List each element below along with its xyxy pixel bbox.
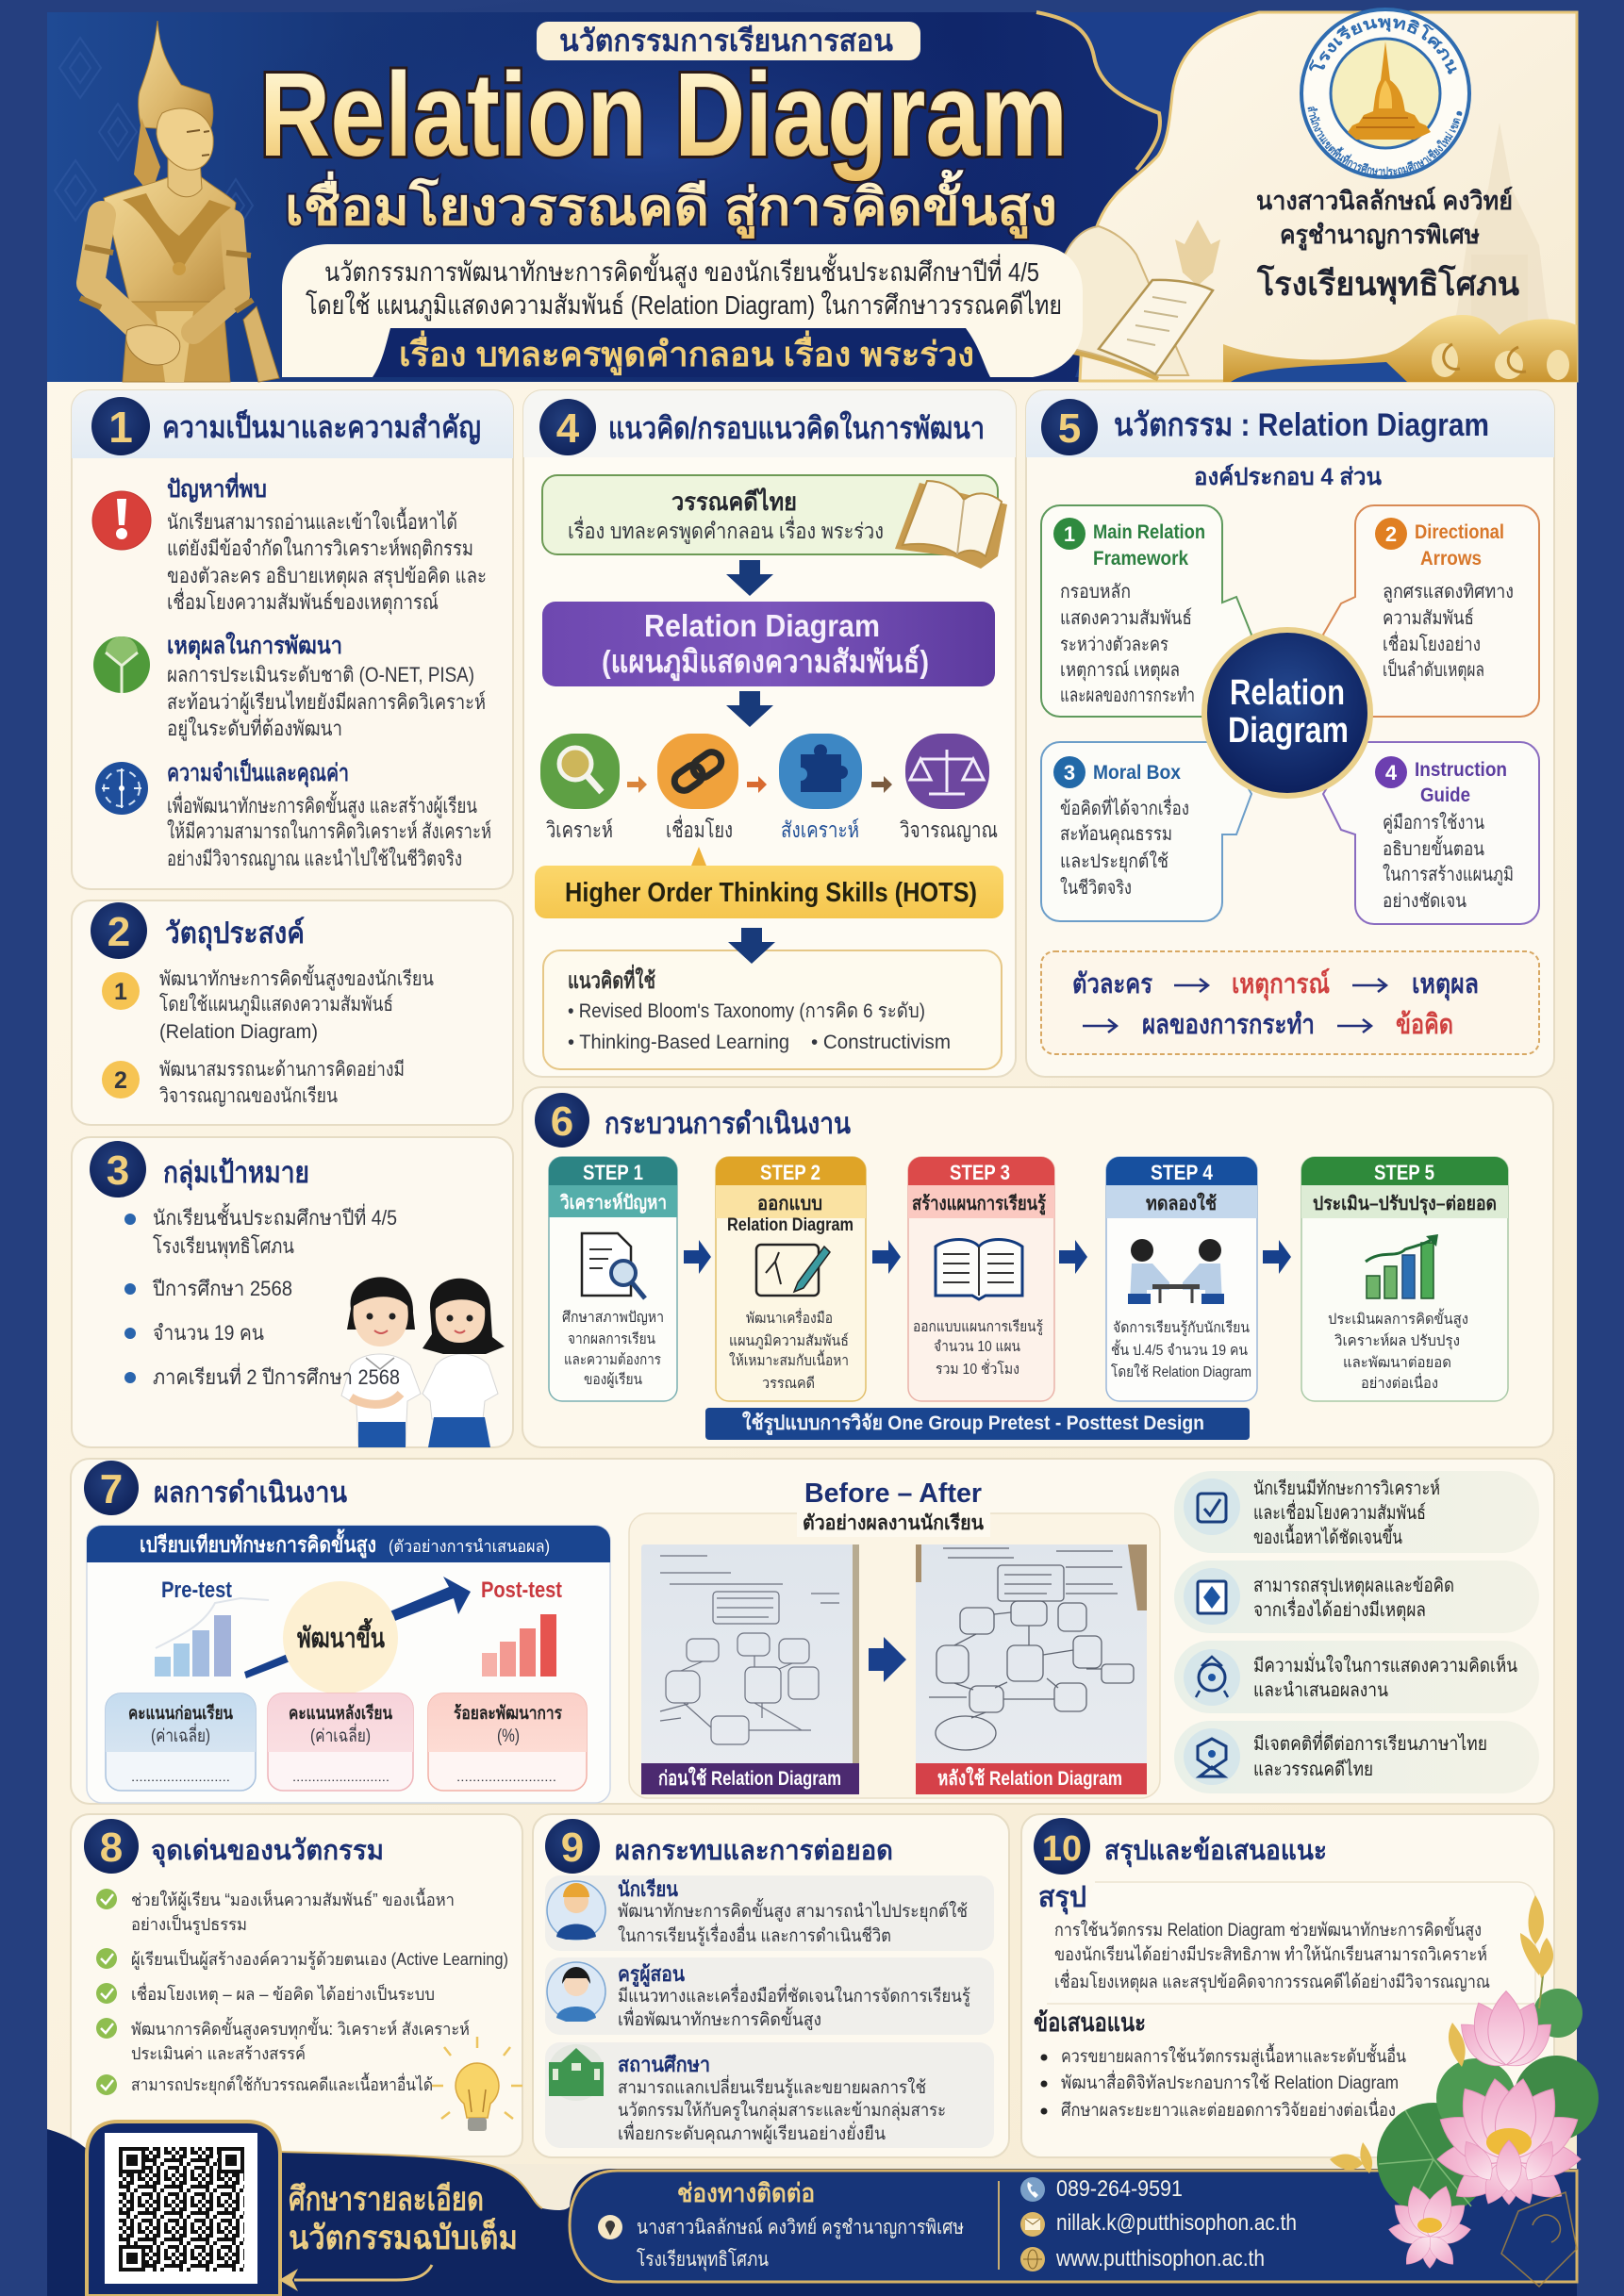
- target list: โรงเรียนพุทธิโศภน: [153, 1234, 294, 1259]
- recommendations block: ศึกษาผลระยะยาวและต่อยอดการวิจัยอย่างต่อเนื่อง: [1061, 2097, 1396, 2121]
- box: directional arrows: Directional: [1415, 521, 1504, 543]
- objective 2: 2: [114, 1067, 127, 1094]
- box: directional arrows: เชื่อมโยงอย่าง: [1383, 631, 1481, 655]
- before-after card: [629, 1476, 1160, 1798]
- box: instruction guide: Instruction: [1415, 759, 1507, 781]
- objective 2: วิจารณญาณของนักเรียน: [159, 1085, 338, 1107]
- step 3: STEP 3: [950, 1161, 1010, 1184]
- step 3: ออกแบบแผนการเรียนรู้: [913, 1319, 1043, 1336]
- arms: [91, 215, 143, 332]
- skill: synthesise: สังเคราะห์: [781, 818, 859, 842]
- block: reason: สะท้อนว่าผู้เรียนไทยยังมีผลการคิดวิเคราะห์: [167, 690, 486, 715]
- footer band: [47, 2122, 1577, 2296]
- step 3: [908, 1157, 1054, 1401]
- objective 2: [102, 1059, 405, 1107]
- box: concepts used: • Thinking-Based Learning: [568, 1032, 789, 1053]
- step 3: จำนวน 10 แผน: [934, 1339, 1020, 1355]
- score box: post: [268, 1693, 413, 1791]
- block: reason: อยู่ในระดับที่ต้องพัฒนา: [167, 714, 342, 741]
- impact: teachers: [545, 1957, 994, 2035]
- step 5: วิเคราะห์ผล ปรับปรุง: [1334, 1332, 1460, 1350]
- panel 10: conclusion: 10: [1042, 1829, 1082, 1869]
- arrow down: [726, 560, 773, 596]
- centre circle: relation diagram: Relation: [1230, 673, 1345, 713]
- score box: pre: .........................: [131, 1770, 230, 1784]
- outcome 4: [1174, 1721, 1539, 1793]
- block: reason: [167, 631, 486, 741]
- panel 9: impact: [533, 1814, 1009, 2157]
- skill: connect: [657, 734, 738, 842]
- panel 2: objectives: 2: [108, 909, 130, 955]
- description bubble: นวัตกรรมการพัฒนาทักษะการคิดขั้นสูง ของนักเรียนชั้นประถมศึกษาปีที่ 4/5: [324, 253, 1039, 289]
- icon: light bulb: [432, 2037, 522, 2131]
- subtitle: เชื่อมโยงวรรณคดี สู่การคิดขั้นสูง: [285, 170, 1057, 239]
- panel 4: concept framework: 4: [556, 405, 580, 452]
- panel 8: highlights: [71, 1814, 522, 2156]
- hands: [126, 325, 180, 365]
- box: moral box: Moral Box: [1093, 762, 1181, 784]
- heading 8: จุดเด่นของนวัตกรรม: [151, 1836, 384, 1867]
- step 4: จัดการเรียนรู้กับนักเรียน: [1113, 1320, 1250, 1337]
- QR prompt: ศึกษารายละเอียด: [289, 2181, 484, 2218]
- box: main relation framework: Framework: [1093, 548, 1188, 570]
- before-after card: Before – After: [804, 1478, 982, 1509]
- panel 4: concept framework: [523, 390, 1016, 1077]
- panel 6: process: 6: [551, 1098, 573, 1145]
- block: value: [167, 758, 491, 870]
- heading 7: ผลการดำเนินงาน: [154, 1478, 347, 1509]
- faint temple: [1443, 123, 1561, 358]
- photo: after: หลังใช้ Relation Diagram: [937, 1766, 1122, 1790]
- outcome 3: [1174, 1641, 1539, 1713]
- sub heading: องค์ประกอบ 4 ส่วน: [1194, 463, 1382, 490]
- objective 1: [102, 965, 434, 1043]
- school logo: [1300, 8, 1471, 179]
- QR card: [87, 2122, 280, 2296]
- box: HOTS: [535, 847, 1003, 918]
- illustration: two students: [341, 1277, 505, 1447]
- step 2: Relation Diagram: [727, 1215, 853, 1235]
- step 1: [549, 1157, 677, 1401]
- icon: blue dial: [95, 762, 148, 815]
- target list: ปีการศึกษา 2568: [152, 1277, 292, 1300]
- step 2: STEP 2: [760, 1161, 820, 1184]
- panel 7: results: 7: [100, 1466, 123, 1512]
- highlight list: เชื่อมโยงเหตุ – ผล – ข้อคิด ได้อย่างเป็นระบบ: [131, 1982, 435, 2005]
- step 5: ประเมินผลการคิดขั้นสูง: [1328, 1308, 1468, 1329]
- post-test chart: [481, 1577, 562, 1677]
- phone: 089-264-9591: [1056, 2176, 1183, 2202]
- lotus: small flower: [1387, 2183, 1472, 2270]
- recommendations block: พัฒนาสื่อดิจิทัลประกอบการใช้ Relation Diagram: [1061, 2070, 1399, 2093]
- icon: open book: [895, 481, 1007, 569]
- step 1: ของผู้เรียน: [584, 1372, 642, 1389]
- lotus leaves: [1330, 1895, 1599, 2216]
- face: [157, 108, 213, 170]
- box: moral box: ในชีวิตจริง: [1060, 877, 1132, 899]
- outcome 1: ของเนื้อหาได้ชัดเจนขึ้น: [1253, 1524, 1402, 1548]
- highlight list: พัฒนาการคิดขั้นสูงครบทุกขั้น: วิเคราะห์ สังเคราะห์: [131, 2017, 470, 2040]
- right blue curve area: [1036, 12, 1577, 377]
- step 1: วิเคราะห์ปัญหา: [559, 1192, 667, 1214]
- heading 2: วัตถุประสงค์: [165, 917, 305, 951]
- box: main relation framework: 1: [1064, 522, 1075, 546]
- right cream area: [1080, 12, 1577, 381]
- box: Thai literature: วรรณคดีไทย: [671, 487, 797, 516]
- impact: school: นวัตกรรมให้กับครูในกลุ่มสาระและข้ามกลุ่มสาระ: [618, 2100, 946, 2122]
- score box: post: (ค่าเฉลี่ย): [310, 1723, 371, 1746]
- step 5: [1301, 1157, 1508, 1401]
- header banner: [47, 8, 1579, 383]
- outcome 4: และวรรณคดีไทย: [1253, 1759, 1373, 1780]
- contact block: โรงเรียนพุทธิโศภน: [637, 2248, 769, 2271]
- step 4: [1106, 1157, 1257, 1401]
- heading 6: กระบวนการดำเนินงาน: [605, 1107, 851, 1140]
- outcome 1: [1174, 1471, 1539, 1553]
- impact: students: [545, 1875, 994, 1951]
- panel 6: process: [522, 1087, 1553, 1447]
- box: directional arrows: [1323, 505, 1539, 717]
- conclusion block: [1038, 1882, 1535, 2004]
- outcome 3: มีความมั่นใจในการแสดงความคิดเห็น: [1253, 1652, 1517, 1677]
- impact: students: ในการเรียนรู้เรื่องอื่น และการดำเนินชีวิต: [618, 1923, 891, 1946]
- step 4: โดยใช้ Relation Diagram: [1111, 1363, 1251, 1380]
- step 2: ให้เหมาะสมกับเนื้อหา: [729, 1349, 849, 1369]
- box: relation diagram: Relation Diagram: [644, 608, 880, 643]
- step 3: สร้างแผนการเรียนรู้: [912, 1193, 1046, 1216]
- header book: [1047, 220, 1220, 379]
- heading 1: ความเป็นมาและความสำคัญ: [162, 408, 481, 445]
- score box: pre: (ค่าเฉลี่ย): [151, 1723, 210, 1746]
- post-test chart: Post-test: [481, 1577, 562, 1603]
- highlight list: ช่วยให้ผู้เรียน “มองเห็นความสัมพันธ์” ของเนื้อหา: [131, 1888, 455, 1910]
- box: directional arrows: ลูกศรแสดงทิศทาง: [1383, 582, 1514, 603]
- box: directional arrows: Arrows: [1420, 548, 1482, 570]
- photo: after: [916, 1544, 1147, 1794]
- outcome 2: จากเรื่องได้อย่างมีเหตุผล: [1253, 1596, 1426, 1622]
- centre circle: relation diagram: [1204, 630, 1370, 796]
- necklace: [123, 193, 231, 273]
- block: reason: เหตุผลในการพัฒนา: [167, 631, 342, 661]
- email: nillak.k@putthisophon.ac.th: [1056, 2210, 1297, 2236]
- teacher name: [1256, 186, 1519, 305]
- arrow: before to after: [869, 1637, 906, 1682]
- step 4: STEP 4: [1151, 1161, 1214, 1184]
- lotus decoration: [1330, 1895, 1599, 2287]
- garment: [123, 297, 230, 382]
- contact block: นางสาวนิลลักษณ์ คงวิทย์ ครูชำนาญการพิเศษ: [637, 2216, 964, 2239]
- score box: percent: .........................: [456, 1770, 556, 1784]
- target list: จำนวน 19 คน: [153, 1321, 264, 1345]
- objective 1: โดยใช้แผนภูมิแสดงความสัมพันธ์: [159, 993, 393, 1016]
- girl: [423, 1354, 498, 1419]
- teacher name: นางสาวนิลลักษณ์ คงวิทย์: [1256, 186, 1513, 215]
- impact: teachers: เพื่อพัฒนาทักษะการคิดขั้นสูง: [618, 2007, 821, 2030]
- title: Relation Diagram: [259, 48, 1068, 181]
- box: main relation framework: ระหว่างตัวละคร: [1060, 635, 1168, 655]
- boy: [341, 1354, 421, 1445]
- box: main relation framework: [1041, 505, 1251, 717]
- step 1: และความต้องการ: [564, 1352, 661, 1368]
- panel 3: target group: 3: [107, 1148, 129, 1194]
- step 4: ทดลองใช้: [1146, 1192, 1217, 1214]
- panel 9: impact: 9: [561, 1825, 584, 1871]
- box: instruction guide: ในการสร้างแผนภูมิ: [1383, 864, 1514, 886]
- highlight list: [131, 1888, 508, 2095]
- panel 8: highlights: 8: [100, 1825, 123, 1871]
- contact block: [598, 2179, 999, 2271]
- impact: school: สถานศึกษา: [618, 2053, 710, 2076]
- outcome 1: และเชื่อมโยงความสัมพันธ์: [1253, 1499, 1426, 1524]
- skill: analyse: วิเคราะห์: [546, 818, 613, 842]
- research design banner: ใช้รูปแบบการวิจัย One Group Pretest - Posttest Design: [742, 1411, 1204, 1436]
- centre circle: relation diagram: Diagram: [1228, 711, 1349, 751]
- flow box: ผลของการกระทำ: [1142, 1010, 1315, 1040]
- block: problem: แต่ยังมีข้อจำกัดในการวิเคราะห์พฤติกรรม: [167, 537, 473, 560]
- outcome 4: มีเจตคติที่ดีต่อการเรียนภาษาไทย: [1253, 1730, 1487, 1755]
- panel 2: objectives: [72, 900, 513, 1125]
- panel 1: background and importance: [72, 390, 513, 889]
- conclusion block: ของนักเรียนได้อย่างมีประสิทธิภาพ ทำให้นักเรียนสามารถวิเคราะห์: [1054, 1944, 1487, 1965]
- box: instruction guide: อย่างชัดเจน: [1383, 891, 1467, 912]
- comparison card: เปรียบเทียบทักษะการคิดขั้นสูง: [140, 1528, 376, 1559]
- pre-test chart: [155, 1577, 269, 1677]
- target list: [124, 1203, 400, 1389]
- description bubble: [282, 244, 1083, 377]
- heading 5: นวัตกรรม : Relation Diagram: [1114, 407, 1489, 443]
- block: value: ให้มีความสามารถในการคิดวิเคราะห์ สังเคราะห์: [167, 819, 491, 843]
- outcome 1: นักเรียนมีทักษะการวิเคราะห์: [1253, 1478, 1440, 1499]
- torso: [104, 174, 236, 302]
- box: concepts used: แนวคิดที่ใช้: [568, 964, 655, 994]
- score box: pre: [106, 1693, 256, 1791]
- conclusion block: สรุป: [1038, 1882, 1086, 1915]
- block: problem: เชื่อมโยงความสัมพันธ์ของเหตุการณ์: [167, 587, 439, 615]
- objective 1: (Relation Diagram): [159, 1021, 318, 1043]
- flow box: เหตุการณ์: [1232, 967, 1330, 1000]
- score box: post: คะแนนหลังเรียน: [289, 1703, 392, 1724]
- impact: school: [545, 2042, 994, 2148]
- research design banner: [705, 1408, 1250, 1440]
- flow box: เหตุผล: [1412, 969, 1479, 1000]
- box: directional arrows: เป็นลำดับเหตุผล: [1383, 657, 1484, 682]
- panel 7: results: [71, 1459, 1554, 1804]
- school logo: โรงเรียนพุทธิโศภน: [1309, 18, 1457, 74]
- box: HOTS: Higher Order Thinking Skills (HOTS): [565, 878, 977, 908]
- step 2: แผนภูมิความสัมพันธ์: [729, 1332, 849, 1350]
- arrow down: [726, 691, 773, 727]
- step 2: ออกแบบ: [757, 1194, 822, 1214]
- teacher name: ครูชำนาญการพิเศษ: [1280, 221, 1480, 251]
- box: moral box: และประยุกต์ใช้: [1060, 851, 1168, 873]
- step 5: และพัฒนาต่อยอด: [1343, 1355, 1451, 1371]
- step 2: วรรณคดี: [762, 1376, 815, 1392]
- score box: pre: คะแนนก่อนเรียน: [128, 1703, 233, 1724]
- recommendations block: ควรขยายผลการใช้นวัตกรรมสู่เนื้อหาและระดับชั้นอื่น: [1061, 2043, 1406, 2067]
- flow box: [1041, 951, 1539, 1054]
- box: main relation framework: กรอบหลัก: [1060, 582, 1131, 603]
- skill: connect: เชื่อมโยง: [666, 815, 733, 842]
- photo: before: ก่อนใช้ Relation Diagram: [658, 1766, 841, 1790]
- box: relation diagram: (แผนภูมิแสดงความสัมพันธ์): [602, 644, 929, 682]
- impact: teachers: มีแนวทางและเครื่องมือที่ชัดเจนในการจัดการเรียนรู้: [618, 1983, 970, 2007]
- box: concepts used: • Constructivism: [811, 1032, 951, 1053]
- QR prompt: นวัตกรรมฉบับเต็ม: [289, 2217, 518, 2256]
- objective 1: พัฒนาทักษะการคิดขั้นสูงของนักเรียน: [159, 965, 434, 991]
- lotus: big flower: [1431, 2075, 1587, 2209]
- step 3: รวม 10 ชั่วโมง: [936, 1359, 1019, 1378]
- QR prompt: [279, 2181, 518, 2291]
- neck: [168, 156, 202, 197]
- gold corner ornament: [1501, 2192, 1577, 2287]
- panel 1: background and importance: 1: [108, 403, 133, 452]
- box: instruction guide: Guide: [1420, 785, 1470, 806]
- highlight list: อย่างเป็นรูปธรรม: [131, 1913, 247, 1935]
- objective 2: พัฒนาสมรรถนะด้านการคิดอย่างมี: [159, 1059, 405, 1081]
- teacher name: โรงเรียนพุทธิโศภน: [1256, 264, 1519, 305]
- block: problem: นักเรียนสามารถอ่านและเข้าใจเนื้อหาได้: [167, 507, 457, 534]
- impact: teachers: ครูผู้สอน: [618, 1962, 685, 1988]
- pill: innovation label: นวัตกรรมการเรียนการสอน: [559, 24, 893, 58]
- outcome 3: และนำเสนอผลงาน: [1253, 1680, 1388, 1701]
- box: main relation framework: แสดงความสัมพันธ์: [1060, 607, 1192, 629]
- block: problem: ปัญหาที่พบ: [167, 472, 267, 503]
- step 5: STEP 5: [1374, 1161, 1434, 1184]
- heading 4: แนวคิด/กรอบแนวคิดในการพัฒนา: [608, 410, 985, 445]
- score box: percent: (%): [497, 1726, 520, 1746]
- highlight list: สามารถประยุกต์ใช้กับวรรณคดีและเนื้อหาอื่นได้: [131, 2073, 433, 2095]
- box: moral box: 3: [1064, 761, 1075, 785]
- check icons: [96, 1889, 117, 2095]
- score box: percent: ร้อยละพัฒนาการ: [454, 1703, 563, 1724]
- skill: analyse: [540, 734, 620, 842]
- step 1: ศึกษาสภาพปัญหา: [562, 1310, 664, 1326]
- box: moral box: สะท้อนคุณธรรม: [1060, 824, 1172, 846]
- box: Thai literature: เรื่อง บทละครพูดคำกลอน เรื่อง พระร่วง: [568, 516, 884, 544]
- comparison card: [87, 1526, 610, 1803]
- box: relation diagram: [542, 602, 995, 686]
- box: instruction guide: [1323, 742, 1539, 924]
- box: moral box: ข้อคิดที่ได้จากเรื่อง: [1060, 795, 1189, 819]
- step 5: อย่างต่อเนื่อง: [1361, 1373, 1438, 1392]
- pre-test chart: Pre-test: [161, 1577, 232, 1603]
- description bubble: โดยใช้ แผนภูมิแสดงความสัมพันธ์ (Relation Diagram) ในการศึกษาวรรณคดีไทย: [306, 289, 1062, 322]
- box: directional arrows: ความสัมพันธ์: [1383, 607, 1474, 629]
- box: instruction guide: อธิบายขั้นตอน: [1383, 835, 1484, 860]
- impact: students: พัฒนาทักษะการคิดขั้นสูง สามารถนำไปประยุกต์ใช้: [618, 1898, 968, 1923]
- panel 5: innovation: [1026, 390, 1554, 1077]
- lotus: top bud: [1451, 1991, 1561, 2076]
- panel 10: conclusion: [1021, 1814, 1554, 2157]
- box: moral box: [1041, 742, 1251, 921]
- score box: post: .........................: [292, 1770, 389, 1784]
- skill: judgement: วิจารณญาณ: [900, 818, 998, 842]
- website: www.putthisophon.ac.th: [1055, 2246, 1265, 2271]
- contact block: ช่องทางติดต่อ: [677, 2179, 815, 2207]
- step 1: จากผลการเรียน: [568, 1331, 655, 1347]
- impact: students: นักเรียน: [618, 1877, 678, 1901]
- arrow down: [728, 928, 775, 964]
- box: concepts used: [543, 950, 1002, 1069]
- contact panel: [570, 2171, 1577, 2282]
- heading 10: สรุปและข้อเสนอแนะ: [1104, 1836, 1327, 1867]
- panel 3: target group: [72, 1137, 513, 1447]
- school logo: สำนักงานเขตพื้นที่การศึกษาประถมศึกษาเชียงใหม่ เขต ๑: [1307, 106, 1462, 175]
- step 1: STEP 1: [583, 1161, 643, 1184]
- box: concepts used: • Revised Bloom's Taxonomy (การคิด 6 ระดับ): [568, 1000, 925, 1022]
- box: main relation framework: เหตุการณ์ เหตุผล: [1060, 659, 1180, 682]
- box: instruction guide: คู่มือการใช้งาน: [1383, 812, 1484, 834]
- impact: school: เพื่อยกระดับคุณภาพผู้เรียนอย่างยั่งยืน: [618, 2121, 886, 2145]
- recommendations block: ข้อเสนอแนะ: [1034, 2008, 1146, 2037]
- highlight list: ประเมินค่า และสร้างสรรค์: [131, 2044, 306, 2063]
- conclusion block: การใช้นวัตกรรม Relation Diagram ช่วยพัฒนาทักษะการคิดขั้นสูง: [1054, 1917, 1482, 1941]
- icon: green reason: [93, 636, 150, 693]
- outcome 2: สามารถสรุปเหตุผลและข้อคิด: [1253, 1576, 1454, 1597]
- flow box: ข้อคิด: [1396, 1010, 1453, 1040]
- comparison card: (ตัวอย่างการนำเสนอผล): [389, 1537, 550, 1556]
- box: directional arrows: 2: [1385, 522, 1397, 546]
- score box: percent: [428, 1693, 587, 1791]
- crown: [139, 21, 213, 132]
- step 5: ประเมิน–ปรับปรุง–ต่อยอด: [1313, 1194, 1497, 1215]
- arrow: improvement: [244, 1577, 471, 1678]
- figure: Thai character: [80, 21, 279, 382]
- heading 3: กลุ่มเป้าหมาย: [163, 1156, 309, 1191]
- icon: warning: [92, 491, 151, 550]
- heading 9: ผลกระทบและการต่อยอด: [615, 1836, 893, 1866]
- small arrows: [627, 776, 892, 793]
- block: problem: ของตัวละคร อธิบายเหตุผล สรุปข้อคิด และ: [167, 564, 487, 588]
- step arrows: [684, 1240, 1291, 1274]
- block: reason: ผลการประเมินระดับชาติ (O-NET, PISA): [167, 663, 474, 686]
- header ornament pattern: [55, 38, 253, 232]
- panel 5: innovation: 5: [1058, 405, 1081, 452]
- box: instruction guide: 4: [1385, 761, 1398, 785]
- highlight list: ผู้เรียนเป็นผู้สร้างองค์ความรู้ด้วยตนเอง (Active Learning): [131, 1948, 508, 1970]
- recommendations block: [1034, 2008, 1406, 2121]
- box: main relation framework: Main Relation: [1093, 521, 1205, 543]
- conclusion block: เชื่อมโยงเหตุผล และสรุปข้อคิดจากวรรณคดีได้อย่างมีวิจารณญาณ: [1054, 1969, 1490, 1993]
- box: main relation framework: และผลของการกระทำ: [1060, 685, 1195, 706]
- box: Thai literature: [542, 475, 998, 554]
- block: value: ความจำเป็นและคุณค่า: [167, 758, 349, 788]
- story title strip: เรื่อง บทละครพูดคำกลอน เรื่อง พระร่วง: [399, 330, 974, 376]
- step 2: พัฒนาเครื่องมือ: [746, 1308, 833, 1327]
- block: value: เพื่อพัฒนาทักษะการคิดขั้นสูง และสร้างผู้เรียน: [167, 791, 477, 818]
- flow box: ตัวละคร: [1072, 969, 1152, 999]
- gold scroll decor: [1223, 315, 1577, 382]
- block: value: อย่างมีวิจารณญาณ และนำไปใช้ในชีวิตจริง: [167, 847, 462, 870]
- improvement circle: [283, 1581, 398, 1694]
- step 4: ชั้น ป.4/5 จำนวน 19 คน: [1111, 1339, 1248, 1359]
- impact: school: สามารถแลกเปลี่ยนเรียนรู้และขยายผลการใช้: [618, 2074, 926, 2098]
- skill: synthesise: [779, 734, 862, 842]
- photo: before: [641, 1544, 859, 1794]
- outcome 2: [1174, 1561, 1539, 1633]
- block: problem: [167, 472, 487, 615]
- before-after card: ตัวอย่างผลงานนักเรียน: [803, 1511, 985, 1534]
- target list: ภาคเรียนที่ 2 ปีการศึกษา 2568: [153, 1363, 400, 1389]
- skill: judgement: [900, 734, 998, 842]
- improvement circle: พัฒนาขึ้น: [297, 1617, 385, 1654]
- target list: นักเรียนชั้นประถมศึกษาปีที่ 4/5: [153, 1203, 397, 1230]
- objective 1: 1: [114, 979, 127, 1005]
- step 2: [716, 1157, 866, 1401]
